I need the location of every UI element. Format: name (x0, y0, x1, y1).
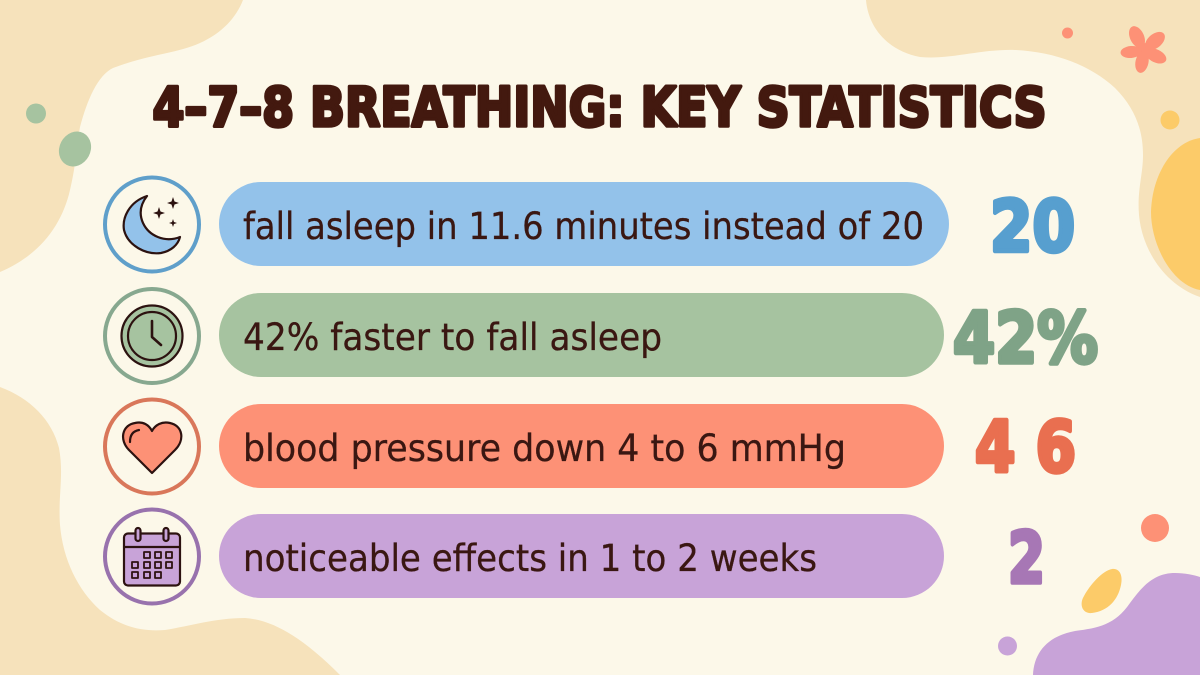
icon: flower (1120, 24, 1169, 74)
background blob: top left (0, 0, 243, 272)
purple blob: bottom right (1033, 573, 1200, 675)
icon: moon and stars (105, 178, 199, 272)
statistic: 20: 20 (990, 186, 1075, 268)
background blob: top right (866, 0, 1200, 297)
bar label: 42% faster to fall asleep (243, 316, 662, 359)
row 1: fall asleep (105, 178, 1075, 272)
yellow blob: right edge (1151, 138, 1200, 290)
title: 4–7–8 BREATHING: KEY STATISTICS (152, 76, 1046, 139)
bar label: blood pressure down 4 to 6 mmHg (243, 427, 846, 470)
background blob: bottom left (0, 387, 340, 675)
bar label: fall asleep in 11.6 minutes instead of 20 (243, 205, 924, 248)
statistic: 2: 2 (1008, 518, 1045, 600)
icon: clock (105, 289, 199, 383)
bar: purple (219, 514, 944, 598)
bar label: noticeable effects in 1 to 2 weeks (243, 537, 817, 580)
bar: green (219, 293, 944, 377)
icon: calendar (105, 510, 199, 604)
row 4: weeks (105, 510, 1045, 604)
statistic: 42%: 42% (953, 298, 1098, 380)
row 2: faster (105, 289, 1098, 383)
icon: heart (105, 400, 199, 494)
bar: blue (219, 182, 949, 266)
statistic: 4 6: 4 6 (975, 406, 1076, 488)
row 3: blood pressure (105, 400, 1076, 494)
bar: coral (219, 404, 944, 488)
